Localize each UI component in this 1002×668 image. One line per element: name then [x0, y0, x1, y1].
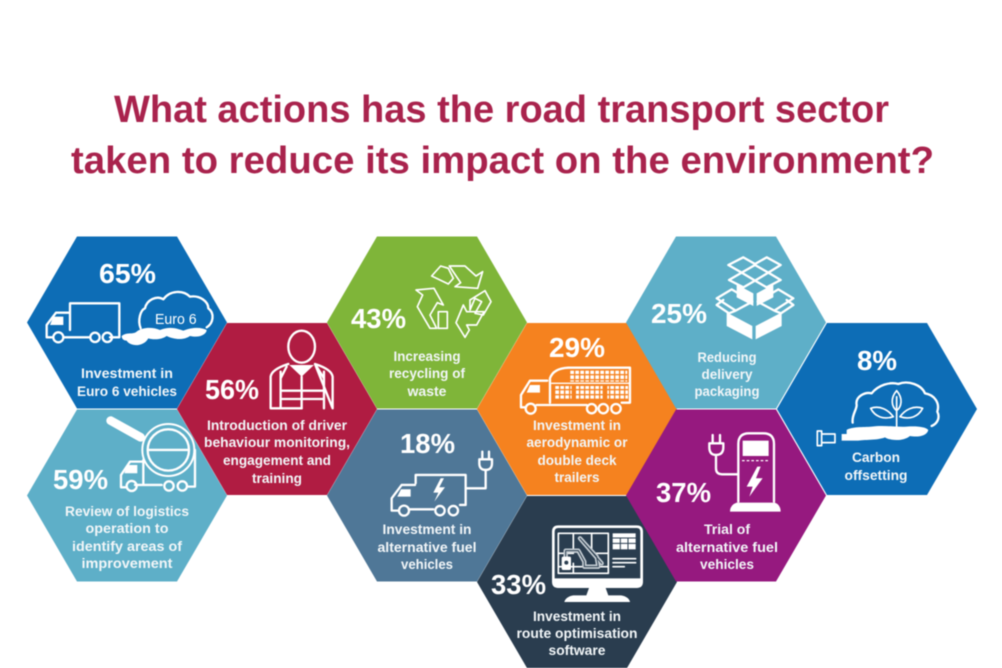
stat: 18%: 18%	[400, 428, 455, 459]
panel: recycling 43%	[327, 236, 527, 408]
stat: 56%: 56%	[205, 374, 259, 405]
label: Investment in alternative fuel vehicles: vehicles	[401, 557, 453, 572]
label: Investment in alternative fuel vehicles	[378, 522, 476, 572]
stat: 37%: 37%	[656, 477, 711, 508]
panel: alternative fuel investment 18%	[327, 410, 527, 582]
label: Investment in aerodynamic or double deck trailers	[526, 418, 628, 485]
icon: truck with Euro 6 cloud: Euro 6	[155, 312, 197, 328]
label: driver behaviour monitoring: Introduction of driver	[207, 418, 348, 433]
label: Investment in aerodynamic or double deck trailers: trailers	[554, 470, 600, 485]
label: Investment in Euro 6 vehicles	[77, 366, 177, 399]
stat: 33%: 33%	[491, 569, 546, 600]
label: Investment in route optimisation software	[516, 609, 638, 658]
panel: logistics review 59%	[27, 410, 227, 582]
label: Carbon offsetting: Carbon	[852, 450, 900, 465]
stat: 43%: 43%	[351, 303, 406, 334]
icon: recycling arrows	[416, 266, 491, 337]
icon: truck under magnifying glass	[111, 421, 195, 491]
label: Investment in aerodynamic or double deck trailers: Investment in	[533, 418, 621, 433]
label: driver behaviour monitoring: behaviour monitoring,	[204, 435, 350, 450]
label: Increasing recycling of waste: waste	[406, 384, 447, 399]
title: taken to reduce its impact on the environment?	[71, 140, 934, 182]
label: Increasing recycling of waste: recycling of	[389, 366, 465, 381]
label: Investment in aerodynamic or double deck trailers: double deck	[538, 453, 617, 468]
panel: aerodynamic trailers 29%	[477, 323, 677, 495]
label: Reducing delivery packaging: Reducing	[698, 350, 756, 365]
label: Reducing delivery packaging: packaging	[694, 384, 760, 399]
panel: Euro 6 vehicles 65%	[27, 236, 227, 408]
icon: worker in high-visibility vest	[271, 331, 333, 408]
label: Investment in Euro 6 vehicles: Euro 6 vehicles	[77, 384, 177, 399]
panel: delivery packaging 25%	[626, 236, 826, 408]
label: driver behaviour monitoring: training	[252, 471, 302, 486]
panel: carbon offsetting 8%	[777, 323, 977, 495]
panel: route optimisation 33%	[477, 496, 677, 668]
label: Investment in alternative fuel vehicles: alternative fuel	[378, 540, 476, 555]
label: Review of logistics operation: improvement	[82, 556, 173, 571]
icon: electric truck with plug	[392, 452, 492, 516]
title: What actions has the road transport sector	[114, 89, 889, 131]
label: Trial of alternative fuel vehicles: alternative fuel	[676, 540, 778, 555]
label: Investment in route optimisation software: Investment in	[533, 609, 621, 624]
panel: driver behaviour 56%	[177, 323, 377, 495]
label: Review of logistics operation: identify areas of	[72, 539, 183, 554]
label: Review of logistics operation	[65, 504, 189, 571]
label: Reducing delivery packaging	[694, 350, 760, 399]
icon: open cardboard box	[717, 257, 793, 339]
label: Investment in Euro 6 vehicles: Investment in	[81, 366, 173, 381]
icon: cloud with plant and exhaust	[817, 383, 939, 446]
title	[71, 89, 934, 182]
icon: charging station with plug	[709, 433, 781, 512]
label: Increasing recycling of waste	[389, 349, 465, 399]
label: Investment in route optimisation software: software	[548, 643, 606, 658]
label: Investment in alternative fuel vehicles: Investment in	[382, 522, 472, 537]
label: Carbon offsetting: offsetting	[844, 468, 908, 483]
stat: 8%: 8%	[857, 345, 897, 376]
label: driver behaviour monitoring	[204, 418, 350, 486]
panel: alternative fuel trial 37%	[626, 410, 826, 582]
icon: monitor with route map	[552, 527, 643, 602]
label: Investment in route optimisation software: route optimisation	[516, 626, 638, 641]
label: Increasing recycling of waste: Increasing	[394, 349, 460, 364]
label: Carbon offsetting	[844, 450, 908, 483]
icon: truck with Euro 6 cloud	[47, 292, 213, 345]
label: Review of logistics operation: Review of logistics	[65, 504, 189, 519]
label: Reducing delivery packaging: delivery	[702, 367, 753, 382]
label: driver behaviour monitoring: engagement and	[223, 453, 331, 468]
icon: double deck truck	[521, 368, 630, 414]
label: Trial of alternative fuel vehicles: vehicles	[700, 557, 754, 572]
stat: 25%: 25%	[651, 298, 707, 329]
label: Review of logistics operation: operation to	[86, 521, 168, 536]
label: Trial of alternative fuel vehicles: Trial of	[704, 522, 751, 537]
label: Trial of alternative fuel vehicles	[676, 522, 778, 572]
label: Investment in aerodynamic or double deck trailers: aerodynamic or	[526, 435, 628, 450]
stat: 59%: 59%	[53, 464, 108, 495]
stat: 65%: 65%	[99, 258, 156, 289]
stat: 29%: 29%	[549, 332, 605, 363]
